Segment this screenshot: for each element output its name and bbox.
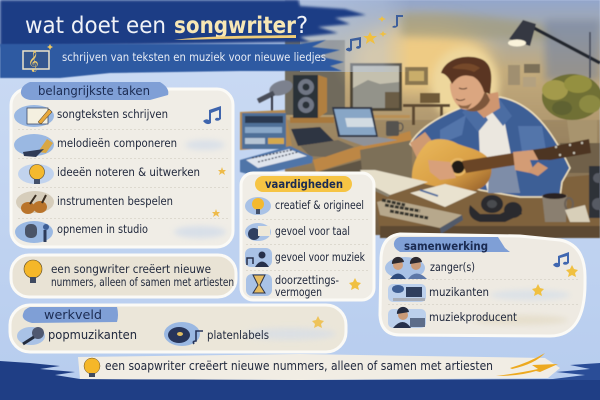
heading: werkveld <box>23 307 118 323</box>
decorative notes and stars in sky <box>346 15 403 52</box>
footer icon: light bulb <box>84 358 100 377</box>
row: doorzettingsvermogen <box>246 273 339 299</box>
panel: vaardigheden <box>241 173 374 300</box>
speaker <box>293 75 327 118</box>
music note <box>203 106 221 124</box>
row: songteksten schrijven <box>14 105 168 127</box>
row: muzikanten <box>388 284 489 302</box>
row: creatief en origineel: creatief & origineel <box>275 198 364 212</box>
row: melodieën componeren <box>14 134 177 157</box>
studio shelf <box>290 117 334 123</box>
footer: brush right <box>545 363 600 380</box>
star <box>349 278 361 290</box>
row: gevoel voor muziek: gevoel voor muziek <box>275 250 365 264</box>
row: zanger(s): zanger(s) <box>430 260 475 274</box>
row: muzikanten: muzikanten <box>429 285 489 299</box>
audio rack <box>240 110 292 150</box>
row: instrumenten bespelen: instrumenten bespelen <box>57 194 173 208</box>
heading: werkveld: werkveld <box>44 308 102 322</box>
right wall lower <box>560 143 600 173</box>
header: dark title band <box>0 0 366 47</box>
tip text <box>51 262 234 289</box>
laptop <box>332 107 398 146</box>
subtitle: schrijven van teksten en muziek voor nieuwe liedjes <box>62 50 326 64</box>
desk lamp <box>508 20 600 78</box>
row: doorzettingsvermogen: vermogen <box>275 285 322 299</box>
subtitle icon: treble clef: 𝄞 <box>28 51 39 72</box>
notebook and sheet <box>360 170 477 207</box>
headphones <box>469 195 522 222</box>
callout: songwriter tip <box>11 255 236 297</box>
row: muziekproducent: muziekproducent <box>429 310 517 324</box>
row: songteksten schrijven: songteksten schrijven <box>57 107 168 121</box>
panel: werkveld <box>10 305 346 352</box>
footer strip <box>78 354 560 380</box>
heading pill: vaardigheden: vaardigheden <box>265 177 343 191</box>
item: platenlabels: platenlabels <box>207 328 269 342</box>
title <box>25 13 308 40</box>
piano keys <box>377 199 463 234</box>
title: wat doet een <box>25 13 166 39</box>
row: doorzettingsvermogen: doorzettings- <box>275 273 339 287</box>
window <box>350 63 402 111</box>
sheet right <box>565 205 590 222</box>
illustration: songwriter in studio <box>240 0 600 238</box>
gold stars <box>212 167 226 217</box>
panel: samenwerking <box>380 234 585 336</box>
row: opnemen in studio: opnemen in studio <box>57 222 148 236</box>
row: muziekproducent <box>388 307 517 328</box>
arrow <box>496 353 558 376</box>
plant <box>542 74 600 143</box>
row: opnemen in studio <box>15 221 148 243</box>
background left of guitar <box>360 140 412 180</box>
heading: samenwerking: samenwerking <box>404 239 488 253</box>
sky wash near header <box>300 0 410 72</box>
music note and stars <box>532 252 578 296</box>
title: songwriter <box>174 13 297 39</box>
heading pill: belangrijkste taken: belangrijkste taken <box>38 84 150 98</box>
item: popmuzikanten: popmuzikanten <box>48 328 137 342</box>
lower desk <box>372 172 600 235</box>
panel: belangrijkste taken <box>11 82 233 247</box>
icon: light bulb <box>24 260 42 283</box>
row: ideeën noteren en uitwerken <box>18 164 200 184</box>
coffee mug <box>542 193 573 222</box>
desk <box>313 131 412 176</box>
tip text: nummers, alleen of samen met artiesten <box>51 275 234 289</box>
microphone <box>258 78 295 112</box>
row: ideeën noteren en uitwerken: ideeën noteren & uitwerken <box>57 165 200 179</box>
footer text: een soapwriter creëert nieuwe nummers, alleen of samen met artiesten <box>105 359 493 373</box>
monitor right <box>589 166 600 218</box>
title: ? <box>296 13 308 39</box>
table behind <box>373 115 410 118</box>
mixer <box>291 127 334 146</box>
desk pad <box>300 140 354 157</box>
row: instrumenten bespelen <box>16 191 173 214</box>
keyboard left <box>240 146 313 176</box>
guitar <box>412 139 591 191</box>
item: platenlabels <box>164 322 269 346</box>
row: zanger(s) <box>385 257 475 279</box>
heading pill: belangrijkste taken <box>21 82 168 100</box>
songwriter <box>410 57 570 197</box>
item: popmuzikanten <box>17 327 137 345</box>
row: gevoel voor taal: gevoel voor taal <box>275 224 350 238</box>
tip text: een songwriter creëert nieuwe <box>51 262 211 276</box>
wall pictures <box>403 64 540 125</box>
row: melodieën componeren: melodieën componeren <box>57 136 177 150</box>
mug <box>386 121 403 136</box>
subtitle icon: treble clef <box>23 44 53 72</box>
header: subtitle band <box>0 40 344 78</box>
footer band <box>0 361 600 400</box>
